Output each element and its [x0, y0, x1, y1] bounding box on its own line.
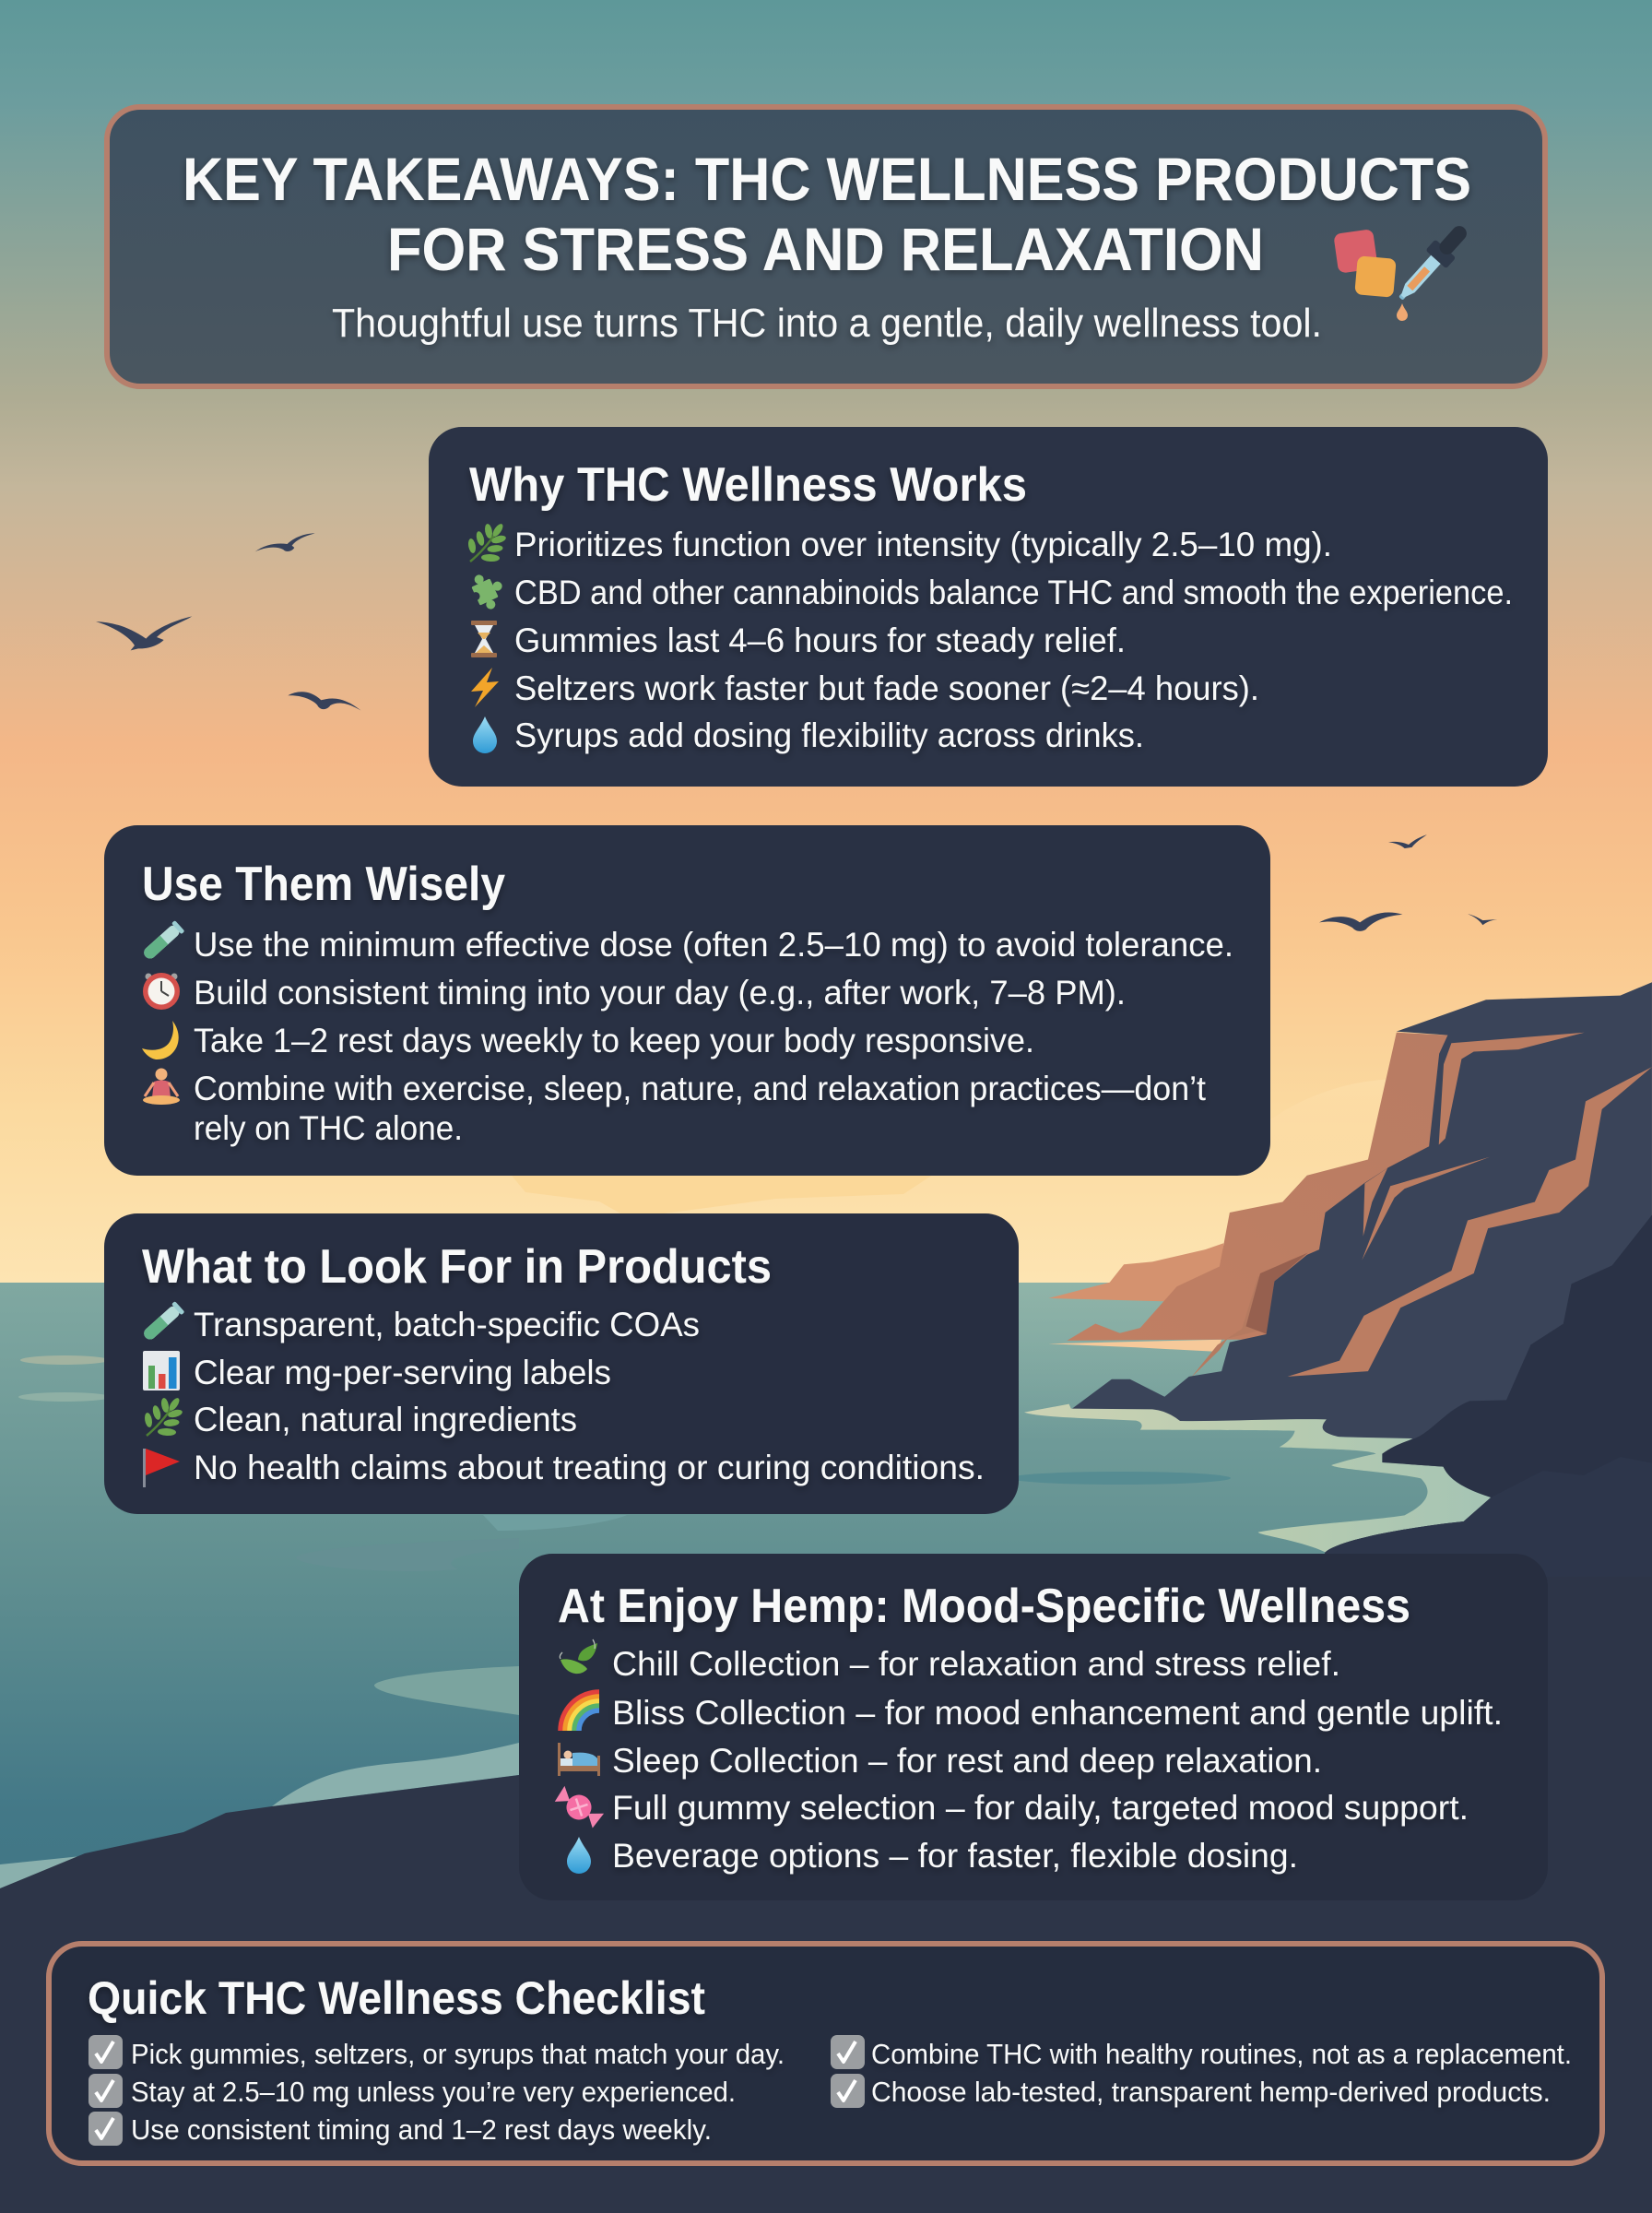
- list rows: [514, 526, 1513, 754]
- icon: bar chart: [143, 1351, 180, 1391]
- icon: leaves in wind: [560, 1639, 597, 1674]
- checklist text: Choose lab-tested, transparent hemp-derived products.: [871, 2076, 1551, 2108]
- icon: puzzle: [464, 567, 510, 615]
- icon: test tube: [141, 920, 184, 962]
- birds left: [96, 533, 361, 711]
- checkbox icons: [88, 2035, 865, 2146]
- card: [519, 1554, 1548, 1900]
- list rows: Combine with exercise, sleep, nature, and relaxation practices—don’t: [194, 1070, 1207, 1107]
- foreground land: [0, 1577, 1652, 2213]
- list rows: Gummies last 4–6 hours for steady relief.: [514, 621, 1126, 659]
- sea: [0, 1283, 1652, 1947]
- lower rock layer: [1299, 1457, 1652, 1604]
- icon: candy: [552, 1783, 606, 1831]
- cliff shadow: [1246, 1253, 1308, 1334]
- list rows: Sleep Collection – for rest and deep relaxation.: [612, 1742, 1322, 1780]
- main cliff brown face: [1067, 1033, 1457, 1341]
- sand strip: [1049, 1340, 1221, 1352]
- pale sun disc: [1171, 1079, 1632, 1540]
- list rows: Full gummy selection – for daily, targeted mood support.: [612, 1789, 1469, 1827]
- icon: gummies and dropper: [1333, 219, 1474, 321]
- list rows: Prioritizes function over intensity (typically 2.5–10 mg).: [514, 526, 1332, 563]
- list rows: Clear mg-per-serving labels: [194, 1354, 611, 1391]
- heading: What to Look For in Products: [142, 1240, 772, 1294]
- title: KEY TAKEAWAYS: THC WELLNESS PRODUCTS: [183, 145, 1471, 213]
- header card: [107, 107, 1545, 386]
- icon: meditation: [143, 1068, 180, 1105]
- icon: herb: [144, 1396, 183, 1437]
- panel: what to look for in products: [104, 1213, 1019, 1514]
- card: [49, 1944, 1602, 2163]
- list rows: [194, 926, 1233, 1147]
- icon: hourglass: [471, 621, 497, 657]
- icon: alarm clock: [143, 973, 180, 1010]
- panel: use them wisely: [104, 825, 1270, 1176]
- list rows: Use the minimum effective dose (often 2.5–10 mg) to avoid tolerance.: [194, 926, 1233, 964]
- list rows: CBD and other cannabinoids balance THC and smooth the experience.: [514, 574, 1513, 611]
- icon: bed: [558, 1743, 600, 1776]
- icon: water drop: [567, 1837, 591, 1874]
- card: [429, 427, 1548, 787]
- list rows: rely on THC alone.: [194, 1109, 463, 1147]
- title: FOR STRESS AND RELAXATION: [387, 215, 1264, 283]
- list rows: Syrups add dosing flexibility across drinks.: [514, 716, 1144, 754]
- icon: crescent moon: [142, 1021, 179, 1059]
- foreground dark rock: [1299, 1215, 1652, 1604]
- icon: herb: [467, 522, 507, 562]
- checklist text: Pick gummies, seltzers, or syrups that match your day.: [131, 2038, 785, 2070]
- checklist text: Combine THC with healthy routines, not as a replacement.: [871, 2038, 1572, 2070]
- card: [104, 1213, 1019, 1514]
- checklist text: Use consistent timing and 1–2 rest days weekly.: [131, 2113, 712, 2146]
- heading: At Enjoy Hemp: Mood-Specific Wellness: [558, 1580, 1410, 1633]
- low cloud: [508, 1171, 938, 1213]
- brown rock strips: [1288, 1033, 1652, 1377]
- checklist text: [131, 2038, 1572, 2146]
- list rows: Seltzers work faster but fade sooner (≈2–4 hours).: [514, 669, 1259, 707]
- list rows: Build consistent timing into your day (e.g., after work, 7–8 PM).: [194, 974, 1126, 1012]
- icon: water drop: [473, 716, 497, 753]
- list rows: Transparent, batch-specific COAs: [194, 1306, 700, 1343]
- list rows: Chill Collection – for relaxation and stress relief.: [612, 1645, 1340, 1683]
- distant headland: [1049, 1243, 1223, 1301]
- title: [183, 145, 1471, 283]
- panel: at enjoy hemp: [519, 1554, 1548, 1900]
- icon: lightning: [471, 668, 499, 707]
- list rows: [194, 1306, 985, 1486]
- birds right: [1319, 834, 1497, 931]
- cliff lower brown ledge: [1191, 1276, 1274, 1378]
- subtitle: Thoughtful use turns THC into a gentle, daily wellness tool.: [332, 301, 1322, 346]
- icon: rainbow: [560, 1692, 599, 1731]
- heading: Quick THC Wellness Checklist: [88, 1972, 705, 2024]
- headlands and cliffs: [1049, 982, 1652, 1472]
- icon: test tube: [141, 1301, 184, 1343]
- checklist text: Stay at 2.5–10 mg unless you’re very experienced.: [131, 2076, 736, 2108]
- card: [104, 825, 1270, 1176]
- icon: red flag: [143, 1449, 180, 1487]
- dark cliff mass: [1069, 982, 1652, 1472]
- list rows: Clean, natural ingredients: [194, 1401, 577, 1438]
- heading: Use Them Wisely: [142, 858, 505, 911]
- panel: quick checklist: [49, 1944, 1602, 2163]
- list rows: Take 1–2 rest days weekly to keep your body responsive.: [194, 1022, 1034, 1059]
- panel: why THC wellness works: [429, 427, 1548, 787]
- sky: [0, 0, 1652, 1284]
- list rows: Bliss Collection – for mood enhancement and gentle uplift.: [612, 1694, 1503, 1732]
- list rows: No health claims about treating or curing conditions.: [194, 1449, 985, 1486]
- header panel: [107, 107, 1545, 386]
- foam shoreline: [1024, 1404, 1491, 1552]
- list rows: [612, 1645, 1503, 1875]
- shoreline and foreground rock: [1024, 1215, 1652, 1604]
- list rows: Beverage options – for faster, flexible dosing.: [612, 1837, 1298, 1875]
- heading: Why THC Wellness Works: [469, 458, 1027, 512]
